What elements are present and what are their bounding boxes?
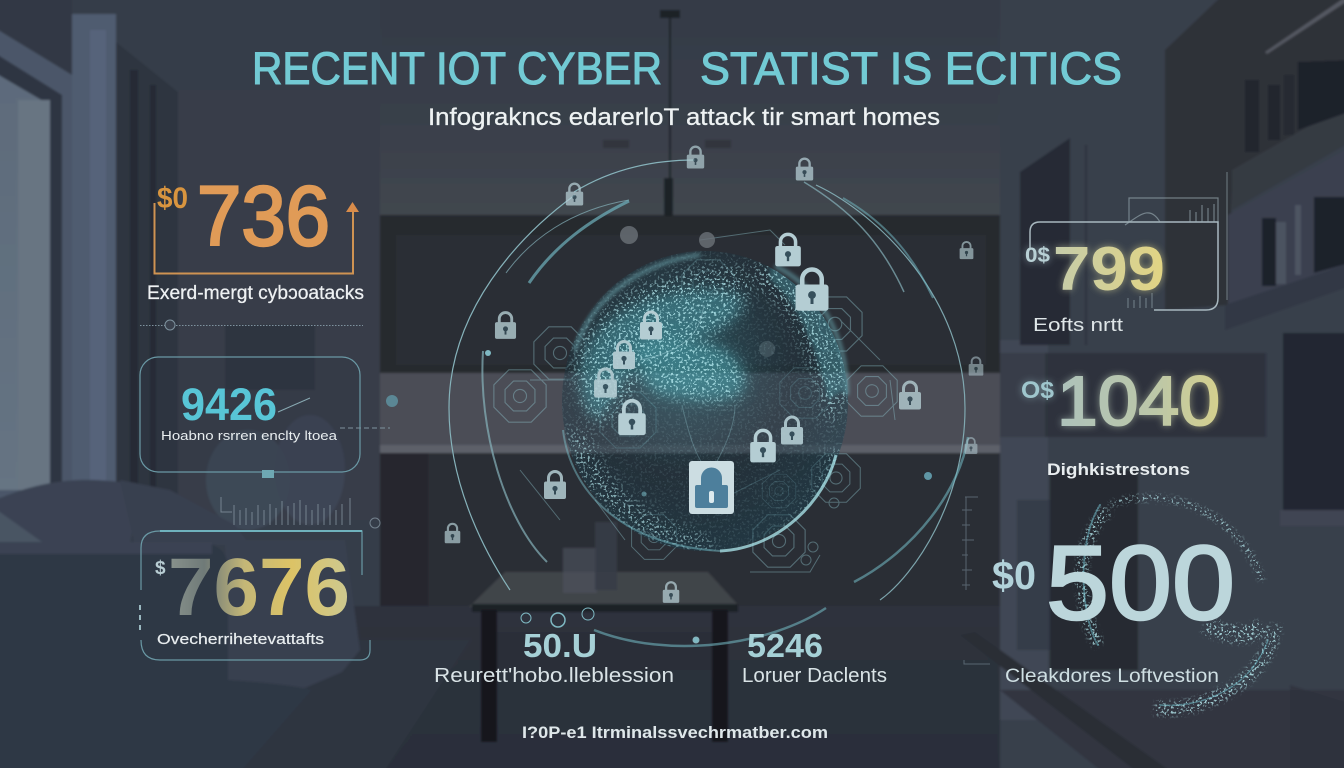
label: Hoabno rsrren enclty ltoea [161,428,338,443]
right stat: 500 [992,525,1235,687]
value: 0$ [1025,244,1050,267]
value: 500 [1046,525,1235,642]
globe sphere [560,250,850,555]
panel frame [140,357,360,472]
left stat panel: 7676 [140,531,370,660]
value: 9426 [181,379,277,430]
label: Ovecherrihetevattafts [157,631,324,648]
label: Reurett'hobo.lleblession [434,665,674,687]
waveform mini chart [221,497,380,528]
value: 50.U [523,627,597,664]
small world swirl hologram [1073,492,1284,719]
value: 7676 [168,542,350,633]
panel tab and connector [262,395,398,478]
left stat panel: teal 9426 [140,357,398,478]
globe hologram with padlocks and rings [445,147,983,646]
value: O$ [1021,377,1055,404]
label: Exerd-mergt cybɔoatacks [147,283,364,304]
bottom stat: 50.U [434,627,674,687]
value: 736 [197,169,330,263]
title: RECENT IOT CYBER [252,43,662,94]
left stat: orange 736 [147,169,364,304]
central padlock badge [689,461,734,514]
node circles [485,226,932,627]
value: 1040 [1057,362,1220,440]
right stat panel: 799 [1025,172,1227,335]
label: Loruer Daclents [742,665,887,687]
value: $ [155,558,166,579]
frame and sparkline [1030,172,1227,310]
label: Dighkistrestons [1047,460,1190,479]
security padlocks [445,147,983,603]
bottom stat: 5246 [742,627,887,687]
concentric orbit rings [449,160,968,646]
value: 799 [1053,235,1165,304]
footer URL: I?0P-e1 Itrminalssvechrmatber.com [522,723,828,742]
value: 5246 [747,627,823,664]
divider marker [140,320,363,330]
title: STATIST IS ECITICS [700,43,1122,94]
side scale ticks [962,497,990,664]
right stat: 1040 [1021,362,1220,479]
panel frame [140,531,370,660]
value: $0 [992,554,1036,598]
value: $0 [157,182,188,215]
subtitle: Infograknᴄs edarerloT attack tir smart homes [428,104,940,131]
label: Eofts nrtt [1033,315,1123,335]
title [252,43,1122,94]
bracket with rising arrow [154,202,359,274]
label: Cleakdores Loftvestion [1005,666,1219,687]
circuit octagons and traces [494,230,897,572]
